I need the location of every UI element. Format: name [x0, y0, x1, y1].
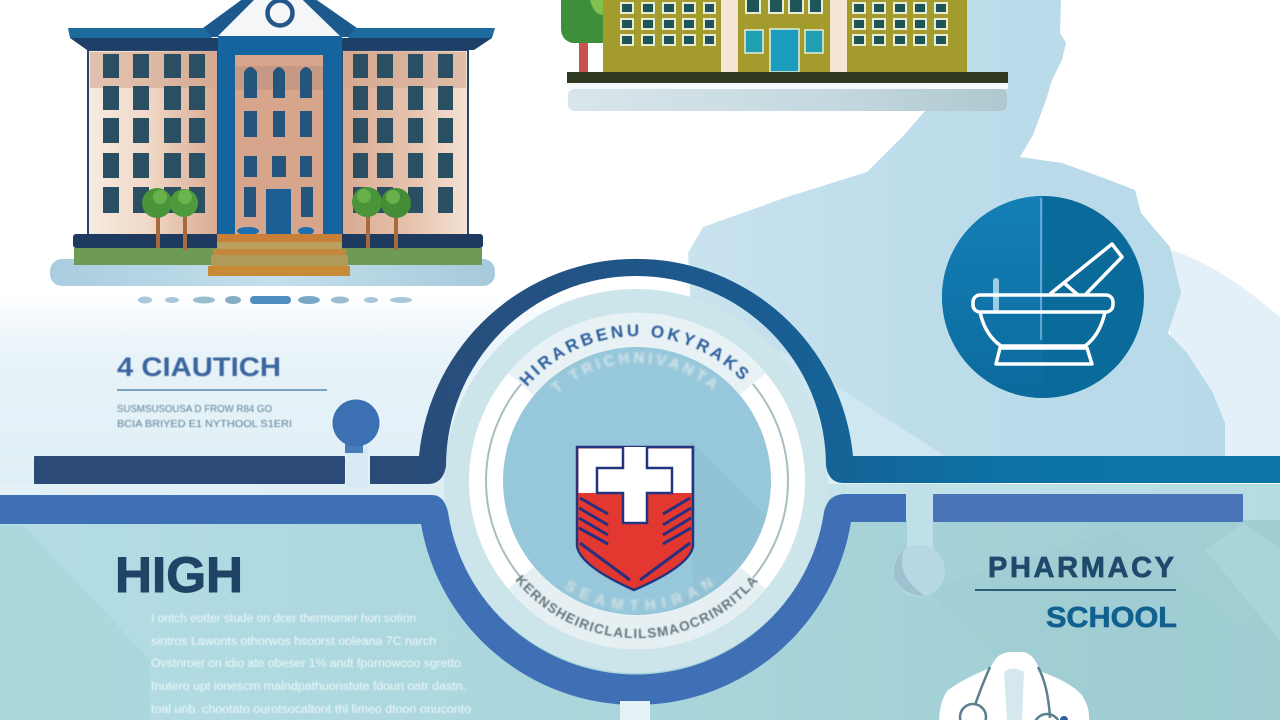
caption: SUSMSUSOUSA D FROW R84 GO [117, 403, 272, 415]
lower section background [0, 484, 1280, 720]
seal rings [469, 313, 805, 649]
medallion backdrop [444, 289, 828, 673]
hall steps [208, 234, 350, 276]
faculty tree [579, 40, 588, 72]
heading block: upper left [117, 352, 327, 430]
body text: I ontch eotter stude on dcer thermomer hon sotion [151, 613, 416, 625]
caption: BCIA BRIYED E1 NYTHOOL S1ERI [117, 418, 292, 430]
faculty shadow [567, 83, 1008, 89]
decorative dots row [138, 296, 412, 304]
hall roof [70, 38, 492, 50]
hall pediment [203, 0, 357, 37]
shield stripes [579, 498, 691, 580]
left pin [332, 400, 380, 488]
body text: toal unb. chootato ourotsocaltont thl fimeo dtoon onuconto [151, 704, 471, 716]
body text: sintros Lawonts othorwos hsoorst ooleana 7C narch [151, 636, 436, 648]
caption [117, 403, 292, 430]
hall trees [142, 187, 411, 250]
faculty windows [621, 0, 947, 45]
lower connector band [0, 494, 906, 705]
rule [117, 389, 327, 391]
seal lettering bands [508, 313, 766, 395]
hall central tower [218, 36, 342, 236]
stethoscope [960, 667, 1060, 720]
hall walls [88, 50, 218, 236]
body text [151, 613, 471, 716]
body text: Ovstnroer on idio ate obeser 1% andt fpornowcoo sgretto [151, 658, 461, 670]
shield cross [597, 447, 672, 523]
heading: HIGH [115, 547, 243, 603]
faculty walls [603, 0, 967, 72]
building: pharmacy faculty [561, 0, 1008, 111]
heading: 4 CIAUTICH [117, 352, 281, 382]
mortar and pestle badge [942, 196, 1144, 398]
seal bottom lettering: KERNSHEIRICLALILSMAOCRINRITLA [515, 574, 758, 639]
right pin [893, 484, 945, 597]
icon: white coat with stethoscope [939, 652, 1089, 720]
bottom connector stem [620, 701, 650, 720]
university seal [469, 312, 805, 650]
right info bar [933, 494, 1243, 522]
faculty door [745, 29, 823, 72]
left info bar [34, 456, 345, 484]
university seal: SEAMTHIRAN [564, 576, 714, 612]
badge disc [942, 196, 1144, 398]
faculty base [567, 72, 1008, 83]
seal ghost lettering: T TRICHNIVANTA [550, 351, 717, 392]
heading block: PHARMACY SCHOOL [975, 552, 1177, 634]
watercolor silhouette [688, 0, 1225, 458]
rule [975, 589, 1176, 591]
heading block: HIGH [115, 547, 471, 716]
hall plinth and lawn [73, 234, 483, 248]
hall windows [103, 54, 453, 213]
coat [939, 652, 1089, 720]
building: main campus hall [50, 0, 495, 304]
body text: Inutero upt ionescrn malndpathuonstute fdoun oatr dastn. [151, 681, 466, 693]
shadow under hall [50, 259, 495, 286]
upper connector band [370, 259, 1280, 484]
heading line one: PHARMACY [988, 552, 1174, 584]
mortar and pestle [973, 244, 1122, 364]
shield emblem [577, 447, 693, 590]
heading line two: SCHOOL [1046, 602, 1177, 634]
